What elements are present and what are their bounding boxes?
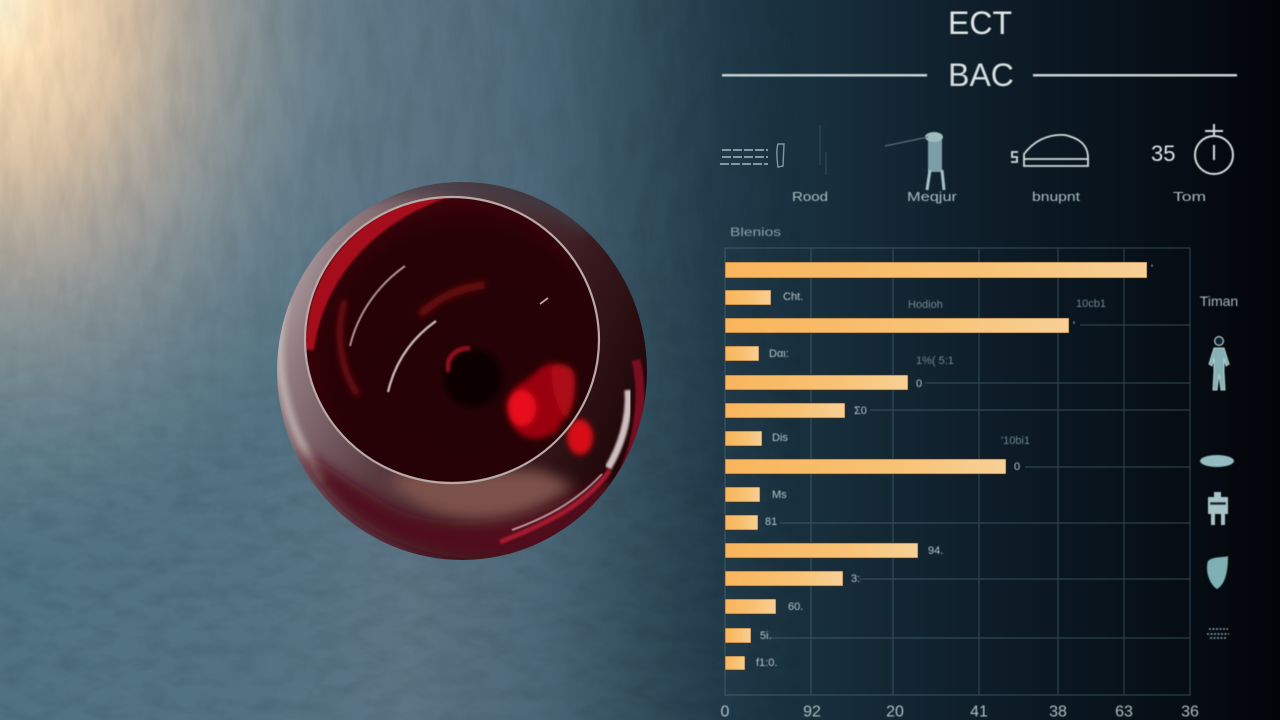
bar value labels: ' — [1073, 320, 1075, 332]
faint annotations — [908, 298, 1106, 447]
side column label: Timan — [1200, 293, 1238, 309]
bar value labels: 5i. — [760, 630, 772, 642]
red reflection outside bowl — [567, 419, 593, 455]
bar value labels: Dαι: — [769, 348, 789, 360]
faint annotations: 1%( 5:1 — [916, 355, 954, 367]
faint annotations: '10bi1 — [1001, 435, 1030, 447]
icon: flat dish — [1200, 455, 1234, 467]
icon: person with arm out — [885, 132, 944, 190]
bar value labels: f1:0. — [756, 657, 777, 669]
bar value labels: 0 — [916, 378, 922, 390]
bar value labels: 81 — [765, 516, 777, 528]
faint annotations: Hodioh — [908, 299, 943, 311]
x axis labels: 20 — [886, 704, 904, 720]
x axis labels: 36 — [1181, 704, 1199, 720]
bar value labels: Dis — [772, 432, 788, 444]
bar value labels: 94. — [928, 545, 943, 557]
red reflections — [506, 364, 575, 439]
x axis labels: 63 — [1115, 704, 1133, 720]
x axis labels: 92 — [803, 704, 821, 720]
heading: ECT: ECT — [948, 5, 1012, 41]
bar value labels — [756, 263, 1153, 669]
icon: human figure — [1209, 336, 1229, 390]
bar value labels: Σ0 — [854, 405, 867, 417]
faint annotations: 10cb1 — [1076, 298, 1106, 310]
wine bowl — [305, 197, 599, 483]
x axis labels: 38 — [1049, 704, 1067, 720]
icon labels: bnupnt — [1032, 189, 1080, 204]
bar value labels: Cht. — [783, 291, 803, 303]
wine glass seen from above — [277, 182, 647, 560]
icon: stopwatch with 35 — [1151, 124, 1233, 174]
bar value labels: 0 — [1014, 461, 1020, 473]
icon labels: Meqjur — [907, 189, 958, 204]
glass base — [277, 182, 647, 560]
chart grid — [725, 248, 1190, 695]
heading: BAC with rules: BAC — [948, 57, 1014, 93]
side icons — [1200, 336, 1234, 638]
bars — [725, 262, 1147, 670]
icon: food — [720, 125, 826, 175]
bar value labels: ' — [1151, 263, 1153, 275]
icon: small mark — [1207, 629, 1229, 638]
glass rim — [305, 197, 599, 483]
bar value labels: 3: — [851, 573, 860, 585]
icon: robot-like pot — [1208, 492, 1228, 525]
bar chart — [721, 248, 1199, 720]
icon labels — [730, 189, 1206, 239]
x axis labels: 0 — [721, 704, 730, 720]
bar value labels: Ms — [772, 489, 787, 501]
x axis labels — [721, 704, 1199, 720]
icon: leaf / fruit — [1207, 556, 1228, 589]
icon labels: Blenios — [730, 225, 781, 239]
icon row — [720, 124, 1233, 190]
icon: stopwatch with 35: 35 — [1151, 141, 1175, 166]
bar value labels: 60. — [788, 601, 803, 613]
icon labels: Tom — [1173, 189, 1206, 204]
icon labels: Rood — [792, 189, 828, 204]
icon: stomach / bread — [1011, 135, 1088, 166]
x axis labels: 41 — [970, 704, 988, 720]
